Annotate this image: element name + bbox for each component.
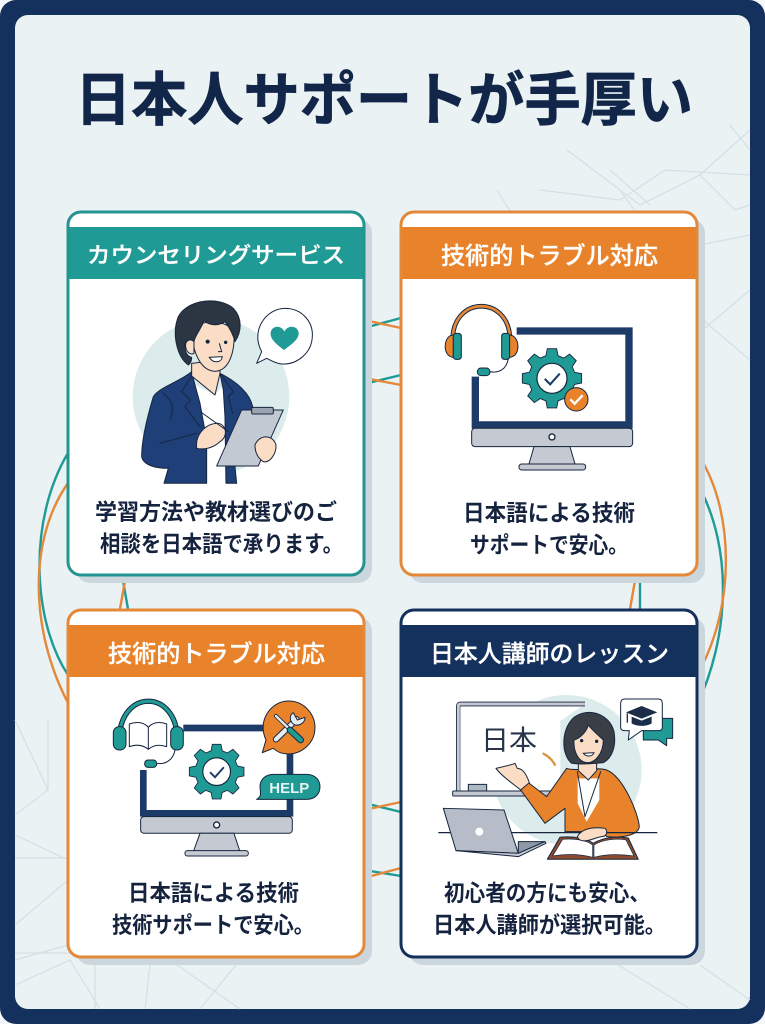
heading: Japanese instructor: [402, 625, 696, 677]
heading: counseling service: [70, 227, 362, 279]
title: 日本人サポートが手厚い: [75, 68, 693, 133]
text block: technical description second: 技術サポートで安心。: [112, 913, 314, 938]
panel: technical support bottom: [68, 610, 372, 965]
text block: technical description: サポートで安心。: [470, 533, 628, 558]
icon: instructor at whiteboard: 日本: [481, 724, 537, 755]
connector lines between cards: [39, 318, 726, 878]
icon: counselor with clipboard: [133, 301, 312, 483]
text block: counseling description: [95, 499, 343, 557]
heading: technical trouble second: [70, 625, 362, 677]
panel: technical support top: [401, 212, 705, 583]
panel: counseling service: [68, 212, 372, 583]
heading: technical trouble: [402, 227, 696, 279]
heading: technical trouble: 技術的トラブル対応: [441, 242, 658, 270]
text block: technical description second: 日本語による技術: [128, 881, 299, 906]
text block: instructor description: [433, 881, 666, 938]
text block: technical description: 日本語による技術: [463, 501, 635, 526]
heading: technical trouble second: 技術的トラブル対応: [108, 640, 325, 668]
panel: Japanese instructor lessons: [401, 610, 705, 965]
text block: instructor description: 初心者の方にも安心、: [444, 881, 650, 906]
text block: counseling description: 学習方法や教材選びのご: [95, 499, 337, 525]
text block: technical description: [463, 501, 635, 558]
heading: counseling service: カウンセリングサービス: [87, 243, 345, 268]
icon: instructor at whiteboard: [438, 695, 673, 859]
icon: monitor with book headset, tools and help: [113, 701, 320, 856]
text block: technical description second: [112, 881, 314, 938]
text block: counseling description: 相談を日本語で承ります。: [100, 532, 343, 557]
icon: monitor with headset and gear: [445, 306, 633, 470]
text block: instructor description: 日本人講師が選択可能。: [433, 912, 666, 938]
heading: Japanese instructor: 日本人講師のレッスン: [430, 641, 669, 668]
icon: monitor with book headset, tools and help: HELP: [269, 781, 310, 797]
